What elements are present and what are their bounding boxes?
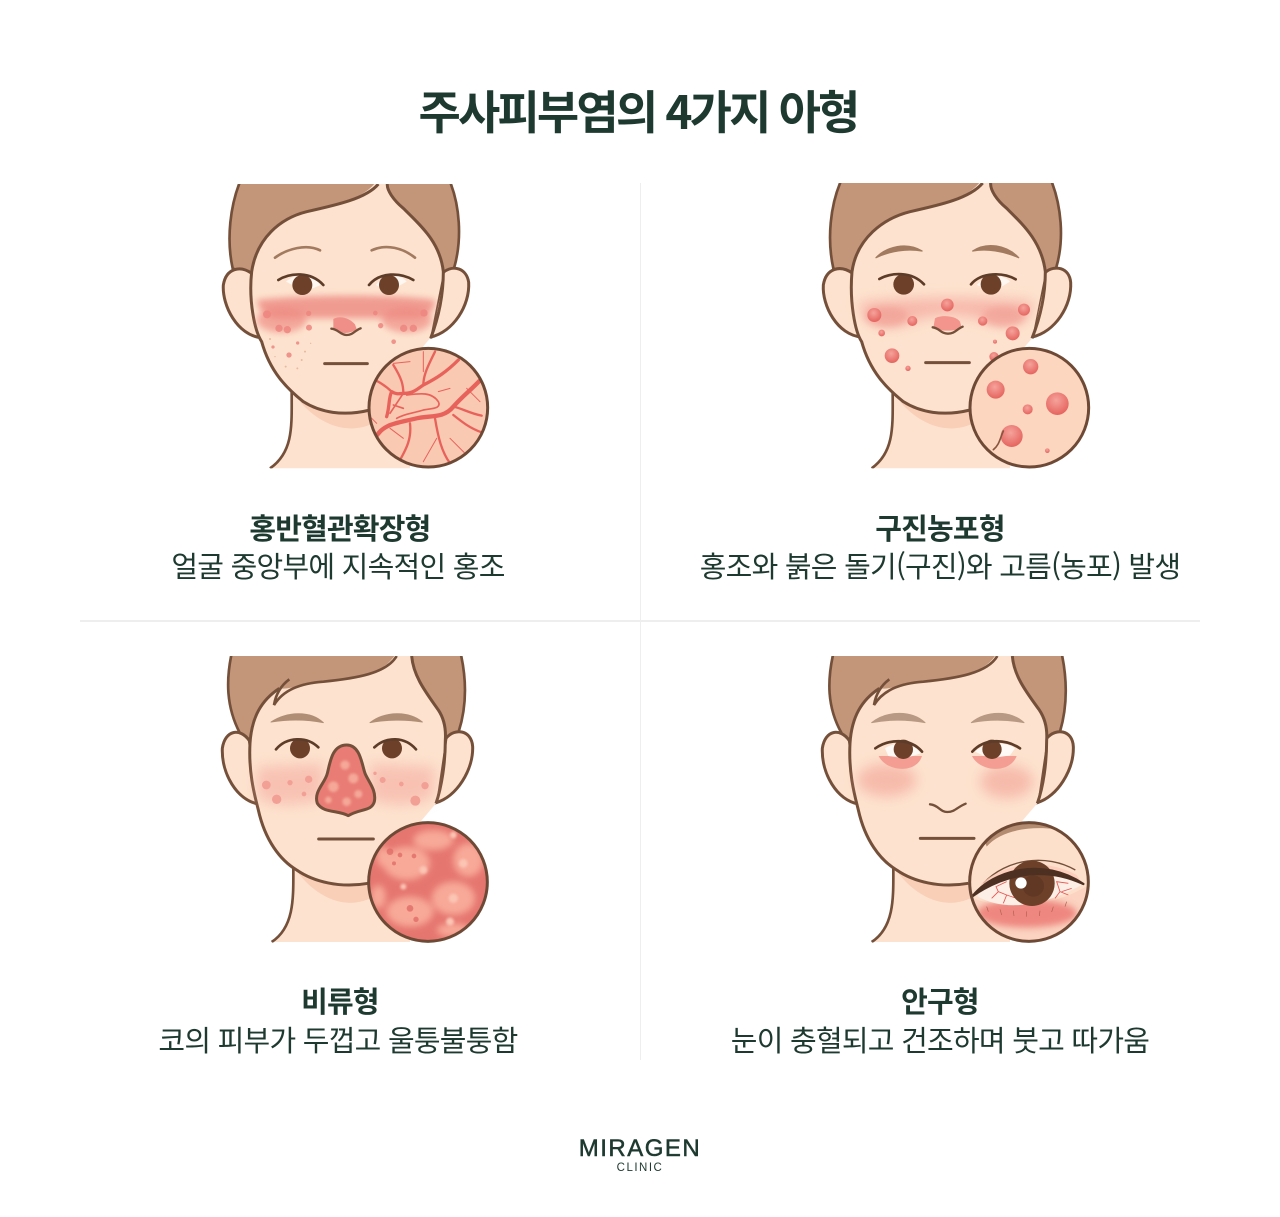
illustration: face with thickened nose xyxy=(220,656,489,943)
logo: Miragen Clinic xyxy=(579,1135,701,1174)
inset: thickened bumpy skin xyxy=(369,823,487,941)
description: 눈이 충혈되고 건조하며 붓고 따가움 xyxy=(731,1018,1149,1060)
illustration: face with red eyes xyxy=(820,656,1090,943)
inset: pustules close-up xyxy=(970,348,1089,467)
panel: erythematotelangiectatic type xyxy=(171,184,505,586)
inset: dilated blood vessels xyxy=(368,348,488,467)
title: 주사피부염의 4가지 아형 xyxy=(418,77,858,143)
panel: papulopustular type xyxy=(700,183,1180,586)
logo: Miragen Clinic: CLINIC xyxy=(617,1162,663,1174)
illustration: face with facial redness xyxy=(222,184,490,468)
inset: bloodshot eye close-up xyxy=(970,817,1090,943)
heading: 홍반혈관확장형 xyxy=(249,506,431,548)
heading: 구진농포형 xyxy=(875,506,1005,548)
description: 얼굴 중앙부에 지속적인 홍조 xyxy=(171,544,505,586)
panel: ocular type xyxy=(731,656,1149,1060)
panel: phymatous type xyxy=(158,656,518,1060)
illustration: face with papules and pustules xyxy=(822,183,1090,468)
logo: Miragen Clinic: MIRAGEN xyxy=(579,1135,701,1162)
description: 코의 피부가 두껍고 울퉁불퉁함 xyxy=(158,1018,518,1060)
heading: 비류형 xyxy=(301,979,379,1021)
heading: 안구형 xyxy=(901,979,979,1021)
description: 홍조와 붉은 돌기(구진)와 고름(농포) 발생 xyxy=(700,544,1180,586)
